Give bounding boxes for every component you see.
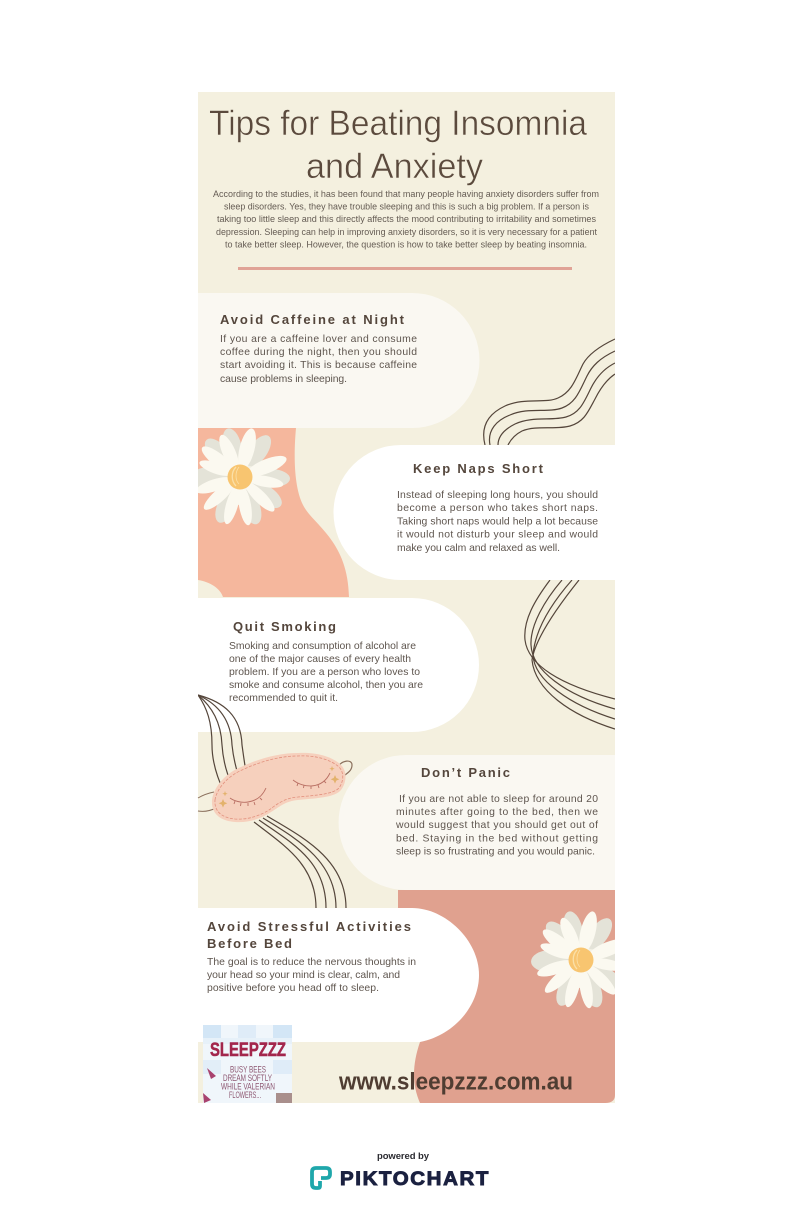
logo tagline: BUSY BEES (230, 1064, 266, 1076)
piktochart logo (312, 1168, 490, 1190)
body: keep naps short: Instead of sleeping long hours, you should (397, 490, 598, 501)
body: keep naps short (397, 490, 598, 554)
body: quit smoking (229, 641, 423, 704)
body: avoid stressful activities: The goal is to reduce the nervous thoughts in (207, 957, 416, 968)
body: quit smoking: smoke and consume alcohol, then you are (229, 680, 423, 691)
website url: www.sleepzzz.com.au (338, 1068, 573, 1096)
body: keep naps short: Taking short naps would help a lot because (397, 516, 598, 528)
logo tagline (221, 1064, 275, 1101)
body: avoid caffeine (220, 334, 417, 385)
body: avoid caffeine: If you are a caffeine lover and consume (220, 334, 417, 345)
title (209, 104, 588, 186)
divider line (238, 267, 572, 270)
body: avoid stressful activities: positive before you head off to sleep. (207, 983, 379, 994)
body: avoid caffeine: coffee during the night, then you should (220, 347, 417, 358)
body: keep naps short: make you calm and relaxed as well. (397, 543, 560, 554)
body: don't panic: minutes after going to the bed, then we (396, 807, 598, 818)
intro text: taking too little sleep and this directly affects the mood contributing to irritability and sometimes (217, 214, 596, 225)
wave lines: right (525, 580, 615, 729)
icon: sleep mask (198, 753, 352, 822)
panel: don't panic (339, 755, 615, 890)
panel: quit smoking (198, 598, 479, 732)
body: avoid stressful activities (207, 957, 416, 994)
intro text: sleep disorders. Yes, they have trouble sleeping and this is such a big problem. If a person is (224, 202, 589, 212)
icon: piktochart mark (312, 1168, 330, 1188)
flower: upper left (198, 428, 290, 526)
closed eye: left (230, 788, 266, 806)
logo flower accents (203, 1068, 292, 1103)
intro text: depression. Sleeping can help in improving anxiety disorders, so it is very necessary for a patient (216, 227, 597, 238)
body: keep naps short: become a person who takes short naps. (397, 503, 598, 514)
body: keep naps short: it would not disturb your sleep and would (397, 530, 598, 540)
intro text: to take better sleep. However, the question is how to take better sleep by beating insomnia. (225, 240, 587, 250)
body: don't panic: bed. Staying in the bed without getting (396, 834, 598, 844)
heading: keep naps short: Keep Naps Short (413, 461, 544, 476)
flower: lower right (531, 911, 615, 1008)
logo wordmark: SLEEPZZZ (210, 1040, 286, 1061)
body: don't panic: sleep is so frustrating and you would panic. (396, 846, 595, 858)
heading: avoid caffeine: Avoid Caffeine at Night (220, 312, 405, 327)
body: don't panic: If you are not able to sleep for around 20 (399, 794, 598, 805)
body: don't panic: would suggest that you should get out of (395, 820, 598, 831)
wave lines: left upper (198, 695, 246, 792)
closed eye: right (293, 773, 330, 789)
body: quit smoking: recommended to quit it. (229, 693, 338, 704)
logo tagline: WHILE VALERIAN (221, 1082, 275, 1092)
body: quit smoking: one of the major causes of every health (229, 654, 411, 665)
title: and Anxiety (306, 147, 483, 186)
wave lines: left lower (254, 816, 346, 908)
body: avoid caffeine: cause problems in sleeping. (220, 374, 347, 385)
logo tagline: FLOWERS... (229, 1090, 261, 1101)
panel: keep naps short (334, 445, 615, 580)
stars (219, 766, 339, 808)
panel: avoid stressful activities (198, 908, 479, 1042)
powered by label: powered by (377, 1151, 430, 1162)
piktochart wordmark: PIKTOCHART (340, 1169, 490, 1190)
heading: quit smoking: Quit Smoking (233, 619, 336, 634)
logo tagline: DREAM SOFTLY (223, 1073, 272, 1084)
intro text: According to the studies, it has been found that many people having anxiety disorders suffer from (213, 189, 599, 200)
intro text (213, 189, 599, 250)
heading: avoid stressful activities: Avoid Stressful Activities (207, 919, 411, 934)
heading: don't panic: Don’t Panic (421, 765, 510, 780)
body: avoid stressful activities: your head so your mind is clear, calm, and (207, 970, 400, 981)
body: quit smoking: Smoking and consumption of alcohol are (229, 641, 416, 652)
heading: avoid stressful activities (207, 919, 411, 951)
salmon blob: upper left (198, 428, 349, 597)
heading: avoid stressful activities: Before Bed (207, 936, 292, 951)
title: Tips for Beating Insomnia (209, 104, 588, 143)
salmon blob: lower right (398, 890, 615, 1103)
poster background (198, 92, 615, 1103)
wave lines: top right (484, 339, 615, 445)
panel: avoid caffeine (198, 293, 480, 428)
logo: sleepzzz book cover (203, 1025, 292, 1103)
body: don't panic (395, 794, 598, 858)
body: avoid caffeine: start avoiding it. This is because caffeine (220, 360, 417, 371)
body: quit smoking: problem. If you are a person who loves to (229, 667, 420, 678)
